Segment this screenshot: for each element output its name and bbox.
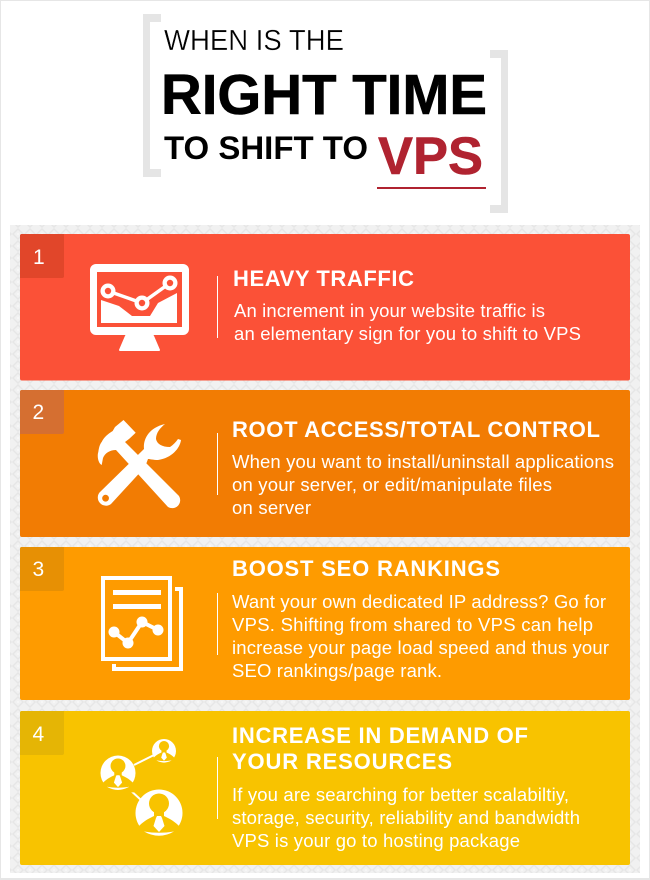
body 2: on server: [232, 497, 311, 518]
badge 2: 2: [32, 401, 44, 424]
badge 3: [20, 547, 64, 591]
body 3: SEO rankings/page rank.: [232, 660, 442, 681]
badge 4: 4: [32, 723, 44, 746]
left bracket: [143, 14, 161, 177]
icon: report pages: [103, 578, 181, 669]
body 4: [232, 784, 580, 851]
body 3: VPS. Shifting from shared to VPS can help: [232, 614, 593, 635]
badge 1: [20, 234, 64, 278]
divider 1: [217, 276, 218, 338]
icon: monitor chart: [90, 264, 189, 350]
card 1 background: [20, 234, 630, 380]
body 1: [234, 300, 581, 344]
badge 2: [20, 390, 64, 434]
right bracket: [490, 50, 508, 213]
body 3: increase your page load speed and thus your: [232, 637, 609, 658]
title line 2: RIGHT TIME: [161, 63, 487, 127]
heading 3: BOOST SEO RANKINGS: [232, 556, 500, 581]
heading 4: INCREASE IN DEMAND OF: [232, 723, 528, 748]
body 1: An increment in your website traffic is: [234, 300, 545, 321]
title line 3: TO SHIFT TO: [164, 130, 368, 166]
panel 3: SEO: [20, 547, 630, 700]
panel 2: root access: [20, 390, 630, 537]
divider 3: [217, 593, 218, 655]
card 4 background: [20, 711, 630, 865]
person large: [133, 790, 185, 839]
body 4: VPS is your go to hosting package: [232, 830, 520, 851]
badge 3: 3: [32, 558, 44, 581]
body 2: [232, 451, 614, 518]
body 1: an elementary sign for you to shift to VPS: [234, 323, 581, 344]
person medium: [99, 755, 137, 792]
person small: [151, 739, 177, 764]
panel 4: resources: [20, 711, 630, 865]
badge 1: 1: [33, 246, 45, 269]
icon: hammer and wrench: [98, 420, 181, 508]
title line 1: WHEN IS THE: [164, 25, 344, 57]
icon: people network: [99, 739, 185, 839]
body 2: When you want to install/uninstall applications: [232, 451, 614, 472]
heading 4: [232, 723, 528, 774]
divider 2: [217, 433, 218, 495]
title block: [143, 14, 508, 213]
body 3: [232, 591, 609, 681]
body 4: If you are searching for better scalabiltiy,: [232, 784, 569, 805]
heading 4: YOUR RESOURCES: [232, 749, 452, 774]
panel 1: heavy traffic: [20, 234, 630, 380]
body 3: Want your own dedicated IP address? Go for: [232, 591, 606, 612]
title VPS: VPS: [378, 127, 483, 186]
card 3 background: [20, 547, 630, 700]
body 2: on your server, or edit/manipulate files: [232, 474, 552, 495]
heading 2: ROOT ACCESS/TOTAL CONTROL: [232, 417, 600, 442]
card 2 background: [20, 390, 630, 537]
textured panel background: [10, 225, 640, 873]
VPS underline: [377, 187, 486, 189]
body 4: storage, security, reliability and bandwidth: [232, 807, 580, 828]
heading 1: HEAVY TRAFFIC: [233, 266, 414, 291]
badge 4: [20, 711, 64, 755]
divider 4: [217, 757, 218, 819]
